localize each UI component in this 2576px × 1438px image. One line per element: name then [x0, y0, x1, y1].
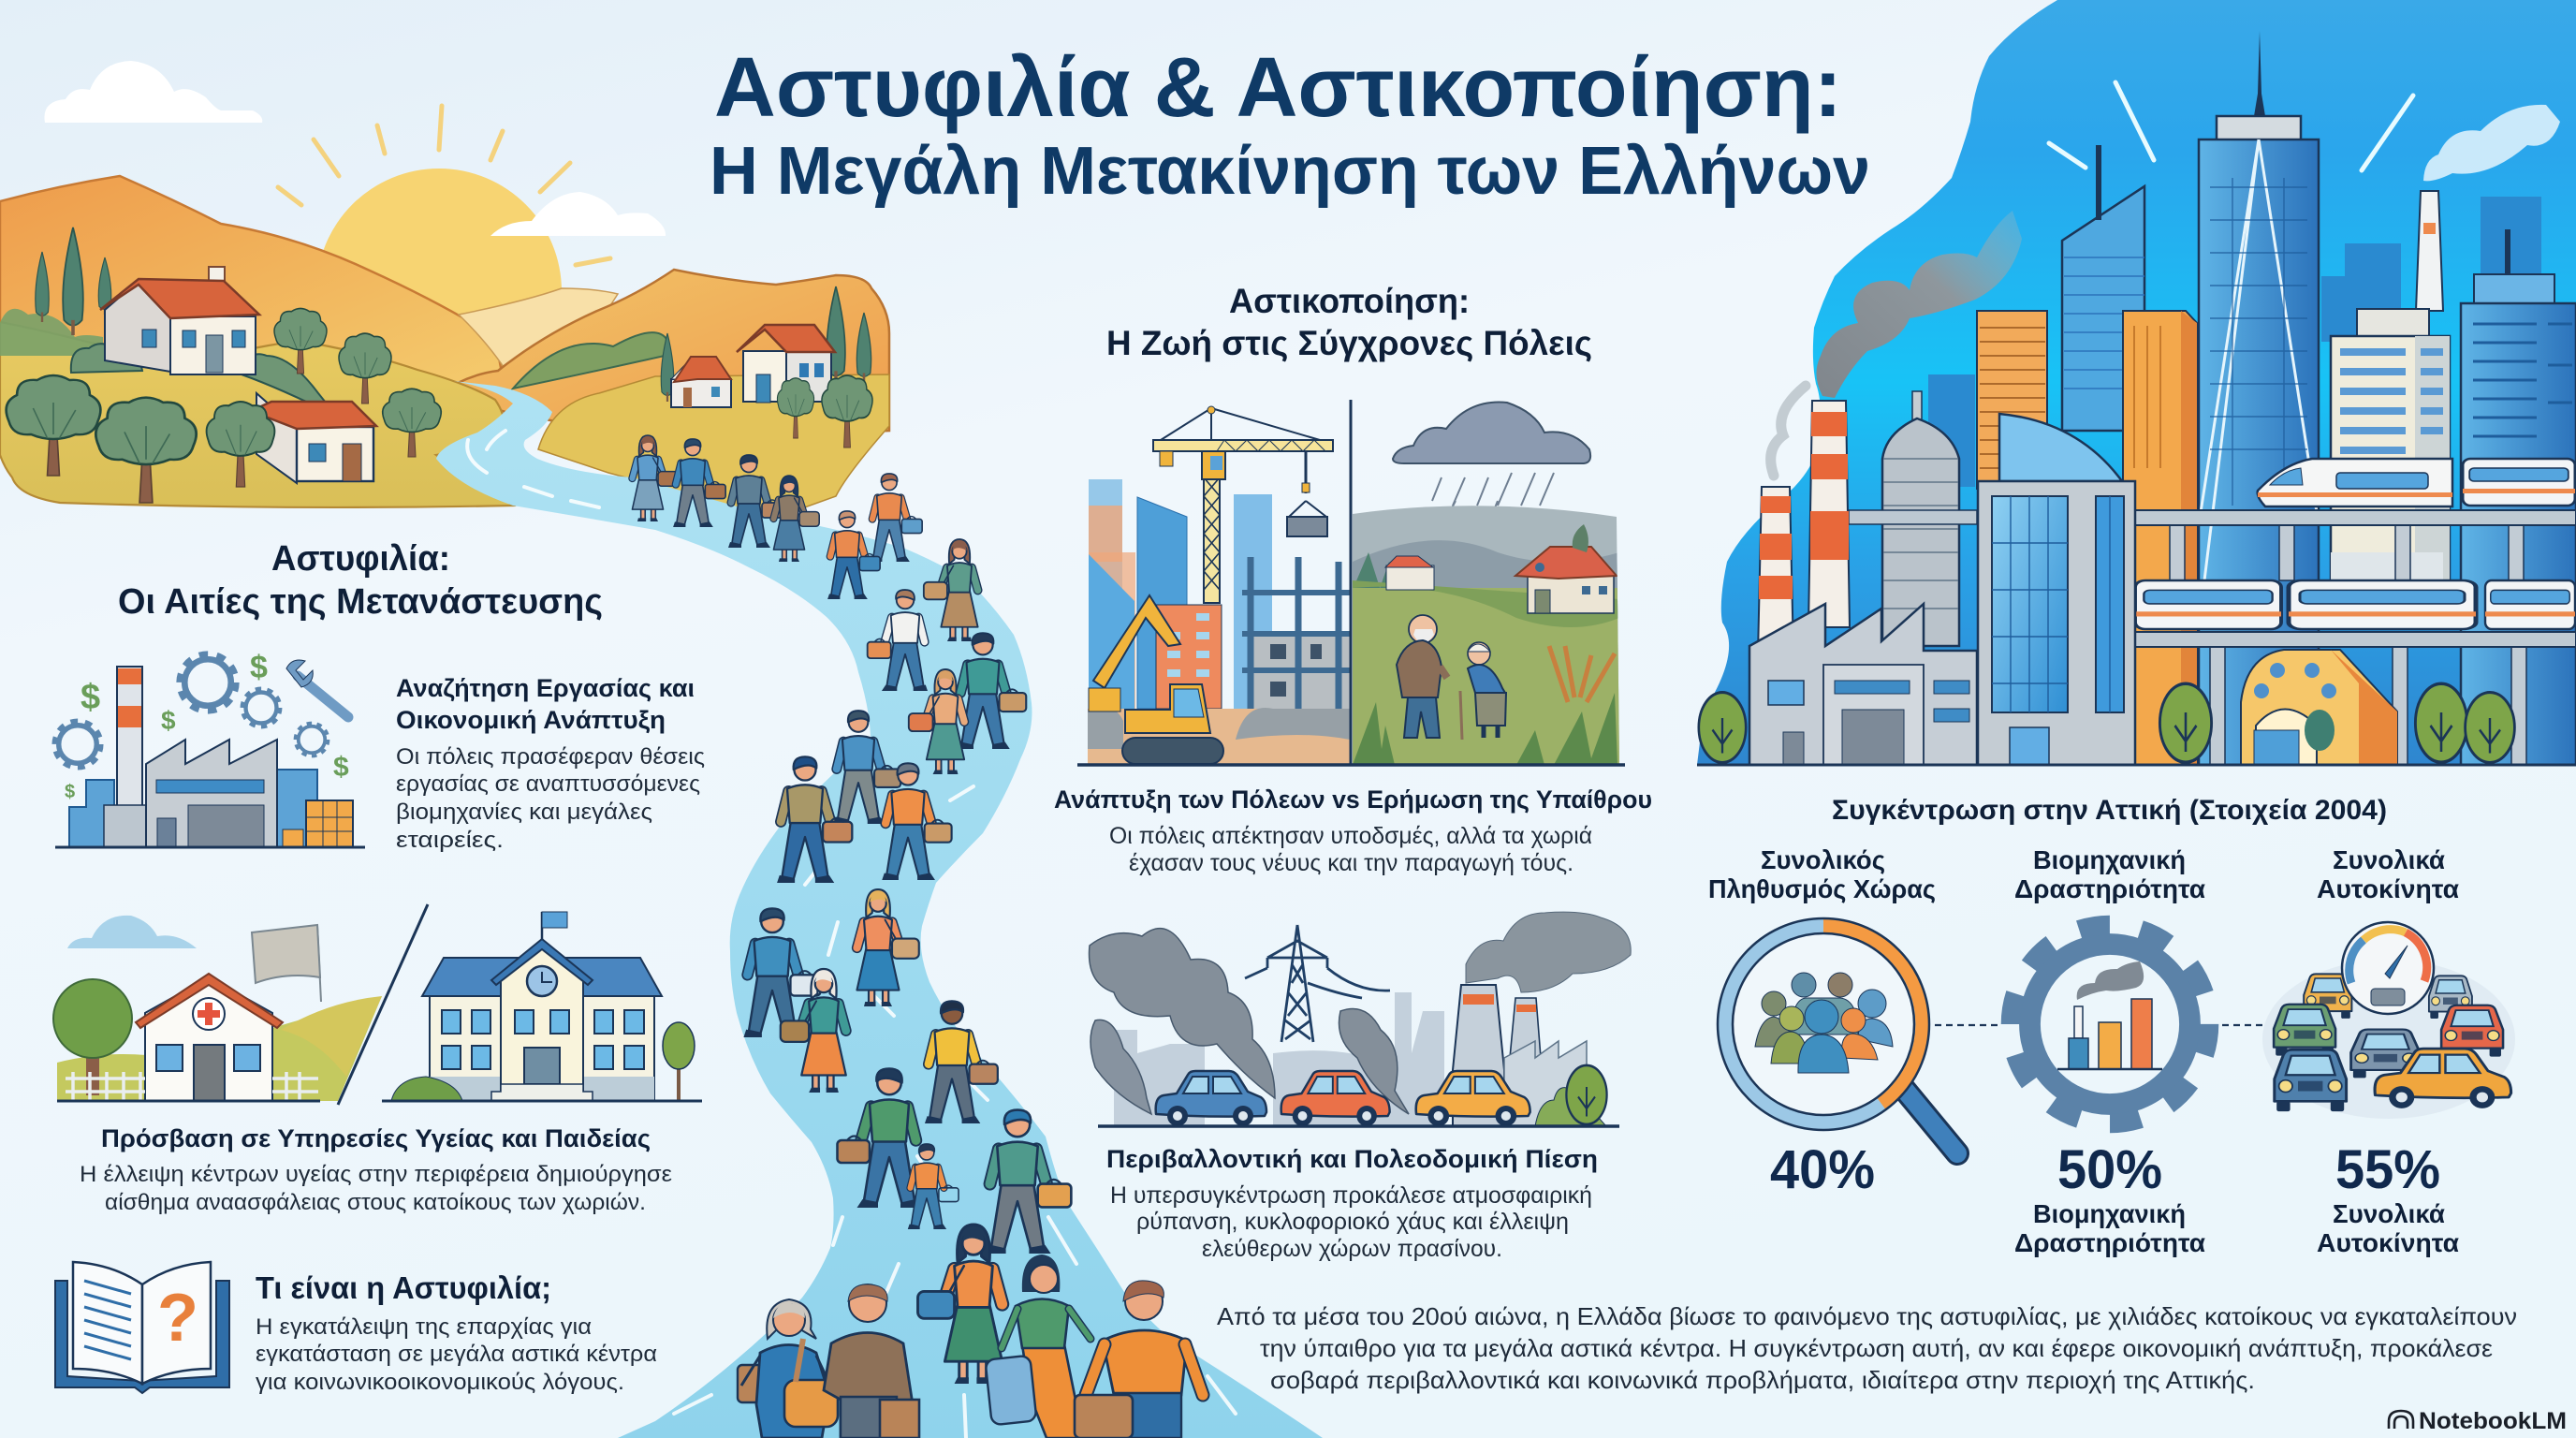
illustration: pollution, cars and factories	[1090, 912, 1631, 1126]
stats heading: Συγκέντρωση στην Αττική (Στοιχεία 2004)	[1832, 795, 2387, 826]
icon: rural clinic and school	[53, 904, 702, 1105]
road: migration path	[436, 381, 1323, 1438]
orange buildings	[1977, 311, 2197, 765]
stat: cars 55%: Συνολικά	[2333, 1199, 2445, 1228]
glass towers	[2062, 31, 2319, 765]
summary paragraph	[1217, 1302, 2517, 1394]
text: environmental pressure: Η υπερσυγκέντρωση προκάλεσε ατμοσφαιρική	[1110, 1182, 1592, 1209]
text: environmental pressure: Περιβαλλοντική και Πολεοδομική Πίεση	[1106, 1145, 1598, 1173]
icon: factory, gears and money: $	[250, 650, 268, 685]
text: health and education: Πρόσβαση σε Υπηρεσίες Υγείας και Παιδείας	[101, 1124, 651, 1152]
icon: gear with bars	[2011, 925, 2209, 1123]
stat: cars 55%	[2262, 845, 2515, 1257]
stat: cars 55%: 55%	[2335, 1139, 2440, 1200]
text: what is astyfilia: Τι είναι η Αστυφιλία;	[256, 1270, 551, 1305]
text: what is astyfilia: για κοινωνικοοικονομικούς λόγους.	[256, 1370, 624, 1395]
smoke plumes	[1771, 211, 2022, 476]
text: what is astyfilia	[256, 1270, 657, 1395]
stat: cars 55%: Αυτοκίνητα	[2317, 874, 2459, 903]
stat: cars 55%: Συνολικά	[2333, 845, 2445, 874]
icon: factory, gears and money: $	[65, 782, 75, 802]
NotebookLM logo: NotebookLM	[2419, 1408, 2567, 1434]
stat: cars 55%: Αυτοκίνητα	[2317, 1228, 2459, 1257]
stat: industry 50%: Δραστηριότητα	[2014, 874, 2205, 903]
text: job seeking: βιομηχανίες και μεγάλες	[396, 800, 652, 825]
text: city growth vs rural desertion: Οι πόλεις απέκτησαν υποδσμές, αλλά τα χωριά	[1109, 823, 1592, 849]
person: woman in blue with two bags	[738, 1299, 838, 1438]
stat: population 40%: Πληθυσμός Χώρας	[1708, 874, 1936, 903]
text: job seeking: Οι πόλεις πρασέφεραν θέσεις	[396, 744, 705, 770]
glass office building	[1978, 414, 2135, 765]
illustration: rural landscape with sun and river	[0, 61, 889, 518]
text: what is astyfilia: Η εγκατάλειψη της επαρχίας για	[256, 1314, 592, 1340]
text: health and education: Η έλλειψη κέντρων υγείας στην περιφέρεια δημιούργησε	[80, 1162, 672, 1187]
illustration: modern city skyline	[1697, 0, 2576, 765]
stat: industry 50%: Βιομηχανική	[2033, 1199, 2186, 1228]
stat: industry 50%: Δραστηριότητα	[2014, 1228, 2205, 1257]
house	[251, 393, 376, 483]
text: job seeking	[396, 674, 705, 853]
elderly couple	[1397, 615, 1506, 740]
summary paragraph: Από τα μέσα του 20ού αιώνα, η Ελλάδα βίωσε το φαινόμενο της αστυφιλίας, με χιλιάδες κατοίκους να εγκαταλείπουν	[1217, 1302, 2517, 1330]
stat: population 40%	[1708, 845, 1957, 1200]
icon: magnifier with people	[1718, 918, 1957, 1153]
text: environmental pressure: ρύπανση, κυκλοφοριοκό χάυς και έλλειψη	[1136, 1209, 1569, 1235]
summary paragraph: σοβαρά περιβαλλοντικά και κοινωνικά προβλήματα, ιδιαίτερα στην περιοχή της Αττικής.	[1270, 1366, 2255, 1394]
text: environmental pressure: ελεύθερων χώρων πρασίνου.	[1202, 1236, 1502, 1262]
text: environmental pressure	[1106, 1145, 1598, 1262]
text: health and education: αίσθημα αναασφάλειας στους κατοίκους των χωριών.	[105, 1190, 646, 1215]
deserted village side	[1353, 403, 1624, 768]
title: Αστυφιλία & Αστικοποίηση:	[714, 41, 1842, 135]
arch building	[2241, 650, 2397, 765]
text: job seeking: εργασίας σε αναπτυσσόμενες	[396, 771, 700, 797]
house	[100, 267, 259, 374]
icon: factory, gears and money	[54, 650, 365, 847]
summary paragraph: την ύπαιθρο για τα μεγάλα αστικά κέντρα. Η συγκέντρωση αυτή, αν και έφερε οικονομική ανάπτυξη, προκάλεσε	[1260, 1334, 2493, 1362]
text: what is astyfilia: εγκατάσταση σε μεγάλα αστικά κέντρα	[256, 1342, 657, 1367]
right buildings	[2331, 191, 2576, 765]
text: city growth vs rural desertion	[1054, 785, 1652, 876]
train viaducts	[2135, 459, 2576, 765]
factory	[1749, 604, 1977, 765]
house	[671, 357, 731, 407]
title	[710, 41, 1870, 209]
heading: Αστικοποίηση	[1106, 282, 1592, 362]
text: job seeking: Οικονομική Ανάπτυξη	[396, 706, 666, 734]
heading: Αστικοποίηση: Η Ζωή στις Σύγχρονες Πόλεις	[1106, 324, 1592, 362]
city construction side	[1088, 406, 1350, 765]
illustration: city construction vs deserted countryside	[1077, 400, 1625, 768]
industrial plant and chimneys	[1758, 391, 1977, 655]
icon: factory, gears and money: $	[161, 706, 176, 735]
text: job seeking: εταιρείες.	[396, 828, 504, 853]
text: city growth vs rural desertion: Ανάπτυξη των Πόλεων vs Ερήμωση της Υπαίθρου	[1054, 785, 1652, 814]
person: man in brown with bag	[824, 1284, 919, 1438]
stat: industry 50%: 50%	[2057, 1139, 2162, 1200]
icon: open book with question mark	[55, 1262, 229, 1393]
text: job seeking: Αναζήτηση Εργασίας και	[396, 674, 695, 702]
icon: cars and speedometer	[2262, 922, 2515, 1119]
person: woman in green and orange	[985, 1255, 1090, 1438]
text: health and education	[80, 1124, 672, 1215]
person: man in orange with bag	[1075, 1281, 1203, 1438]
stat: industry 50%	[2011, 845, 2209, 1257]
stat: population 40%: 40%	[1770, 1139, 1875, 1200]
heading: Αστυφιλία causes: Αστυφιλία:	[271, 539, 450, 579]
title: Η Μεγάλη Μετακίνηση των Ελλήνων	[710, 134, 1870, 209]
icon: open book with question mark: ?	[157, 1281, 198, 1356]
heading: Αστυφιλία causes: Οι Αιτίες της Μετανάστευσης	[118, 582, 603, 622]
heading: Αστυφιλία causes	[118, 539, 603, 622]
text: city growth vs rural desertion: έχασαν τους νέυυς και την παραγωγή τόυς.	[1129, 850, 1573, 876]
people walking along the road	[632, 435, 1071, 1384]
icon: factory, gears and money: $	[333, 752, 349, 783]
heading: Αστικοποίηση: Αστικοποίηση:	[1229, 282, 1470, 320]
stat: population 40%: Συνολικός	[1761, 845, 1885, 874]
stat: industry 50%: Βιομηχανική	[2033, 845, 2186, 874]
house	[737, 325, 835, 403]
icon: factory, gears and money: $	[80, 678, 100, 717]
